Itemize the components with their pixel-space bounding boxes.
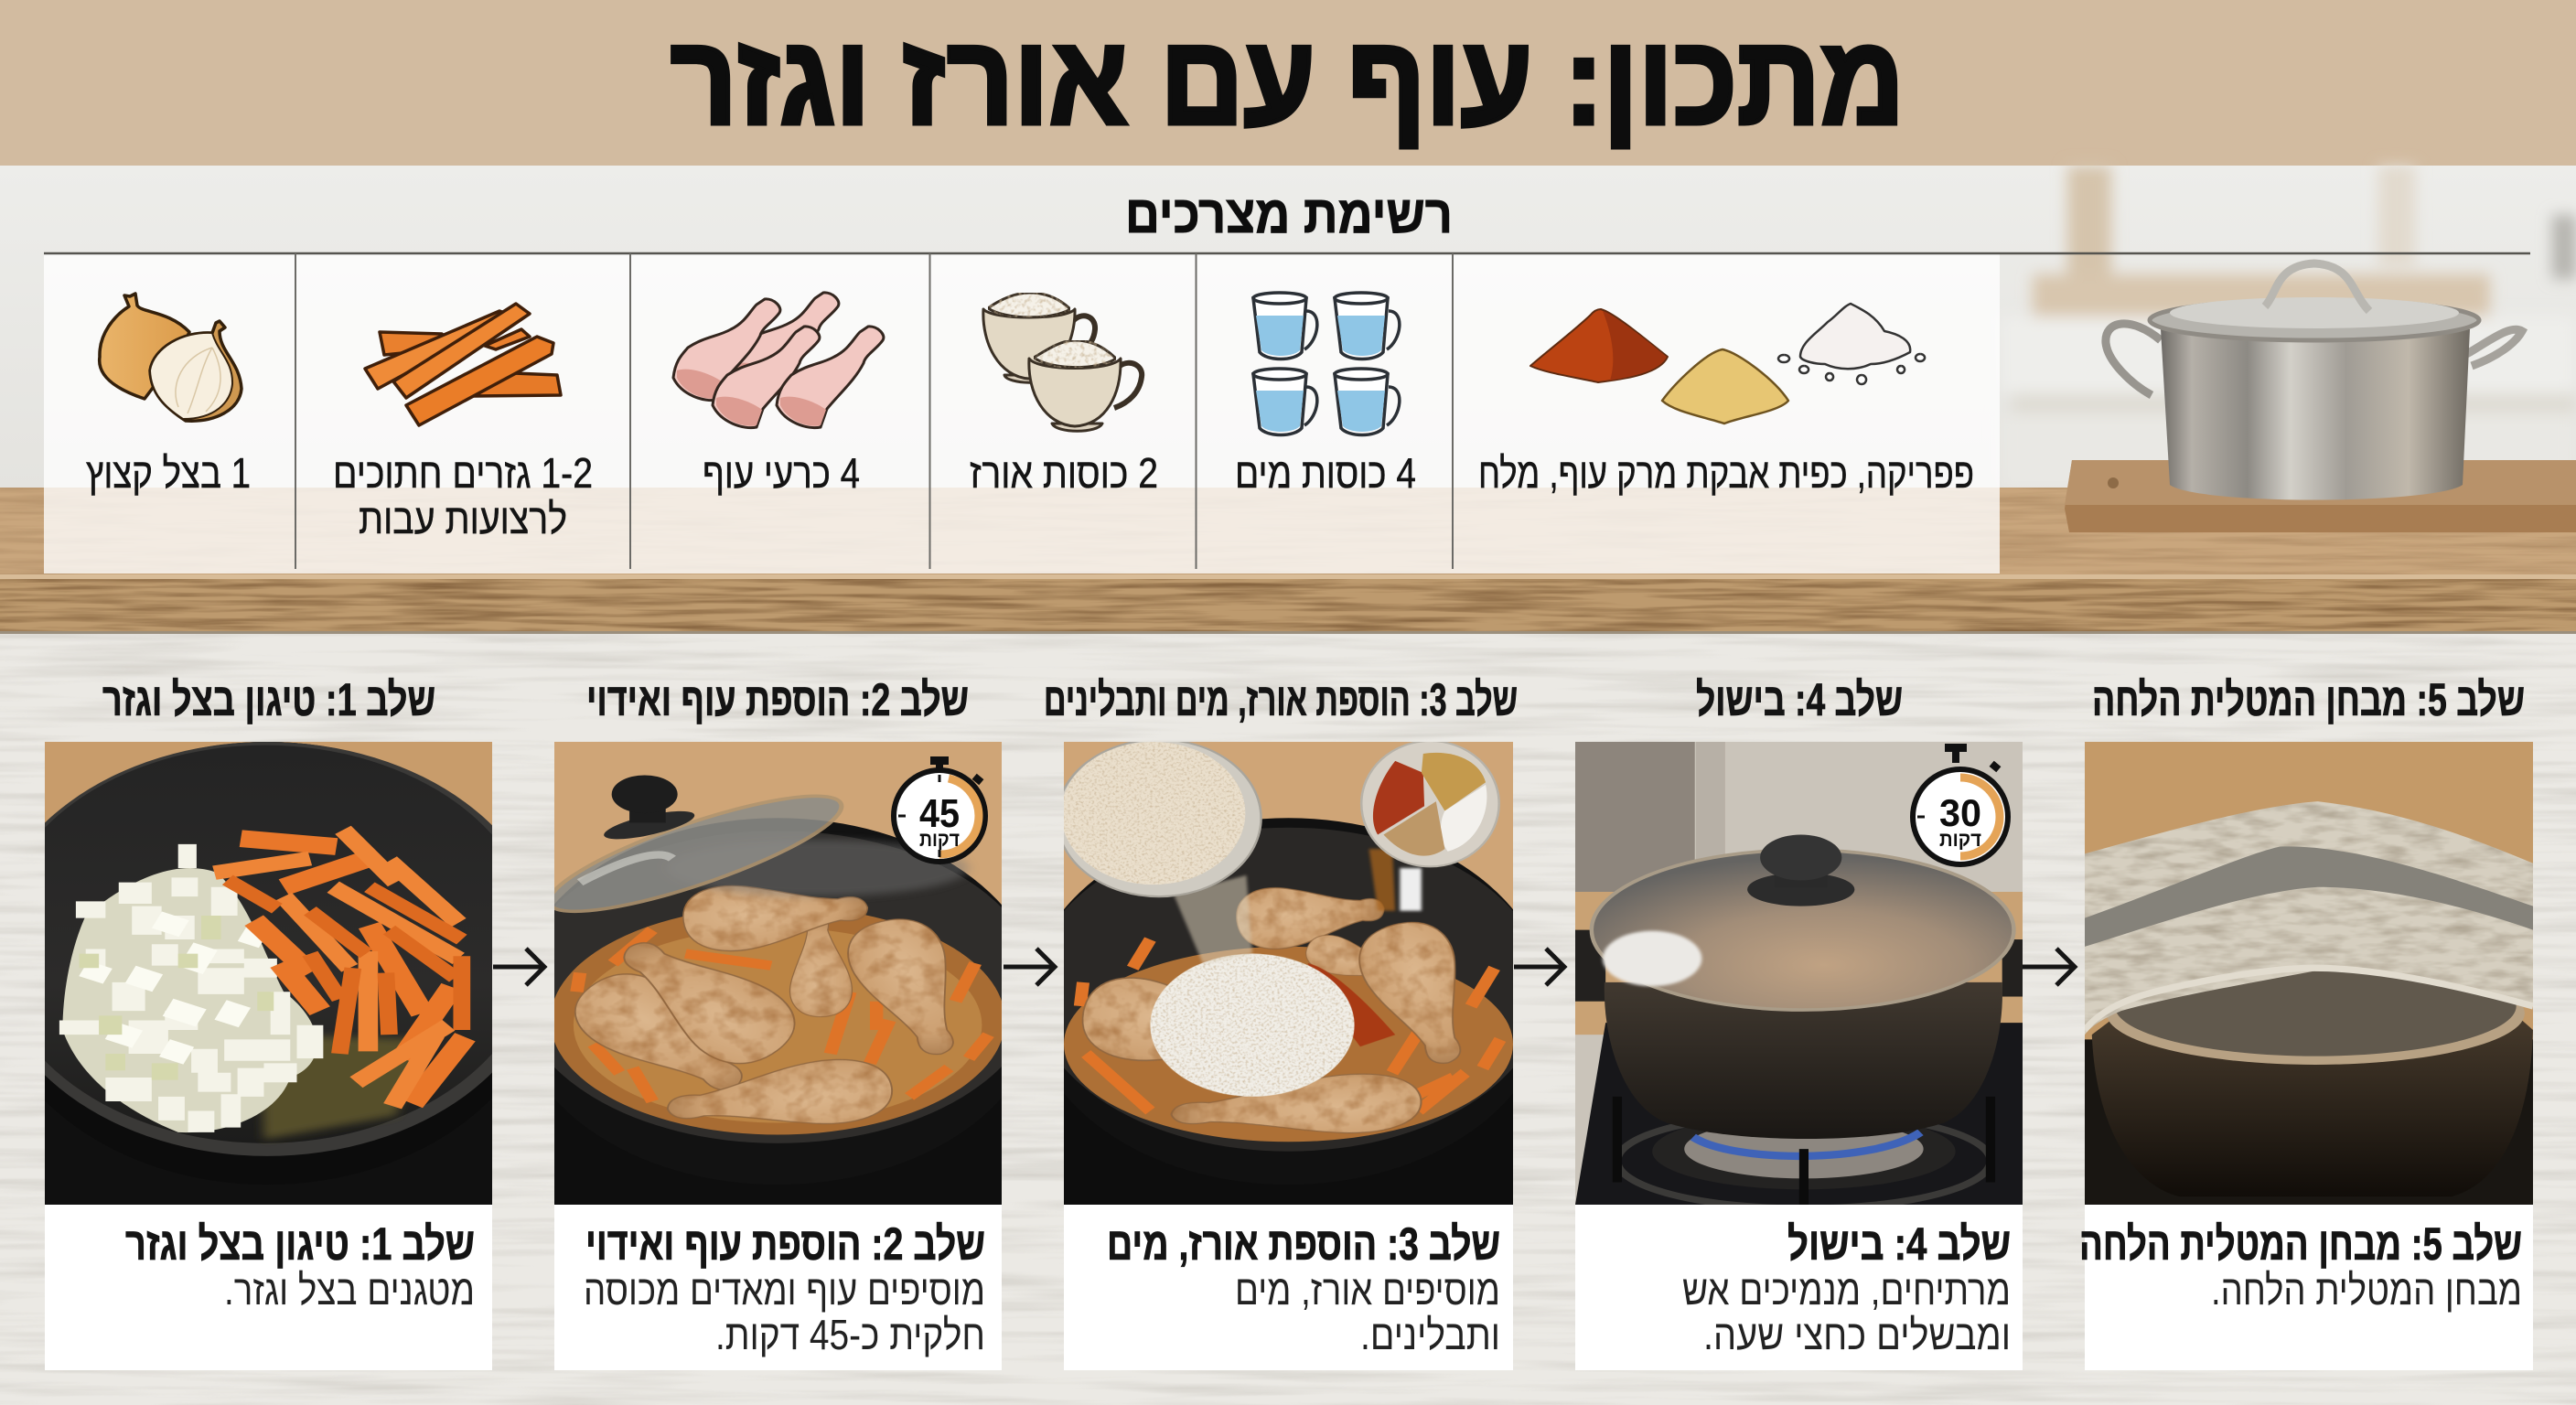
- photo: pot on gas burner: [1575, 742, 2023, 1205]
- ingredient: carrots: [333, 304, 593, 542]
- header band: [0, 0, 2576, 166]
- heading: step 4: שלב 4: בישול: [1696, 674, 1903, 725]
- caption card: step 3: [1064, 1205, 1513, 1370]
- caption card: step 5: מבחן המטלית הלחה.: [2211, 1266, 2522, 1314]
- label: water: 4 כוסות מים: [1235, 449, 1416, 497]
- ingredient: rice: [970, 293, 1158, 497]
- heading: step 5: שלב 5: מבחן המטלית הלחה: [2092, 674, 2525, 725]
- icon: chicken drumsticks: [673, 293, 884, 428]
- kitchen backdrop with counter: [0, 166, 2576, 634]
- caption card: step 2: מוסיפים עוף ומאדים מכוסה: [584, 1266, 985, 1314]
- caption card: step 4: מרתיחים, מנמיכים אש: [1682, 1266, 2011, 1314]
- heading: step 2: שלב 2: הוספת עוף ואידוי: [586, 674, 969, 725]
- photo: chicken with lid: [554, 742, 1002, 1205]
- timer: 30 minutes: [1913, 744, 2008, 864]
- caption card: step 4: [1575, 1205, 2023, 1370]
- label: rice: 2 כוסות אורז: [970, 449, 1158, 497]
- caption card: step 5: [2079, 1205, 2533, 1370]
- photo: towel over pot: [2085, 742, 2533, 1205]
- photo: frying onion and carrot: [45, 742, 492, 1205]
- step 3: [1029, 674, 1548, 1370]
- heading: step 3: שלב 3: הוספת אורז, מים ותבלינים: [1044, 674, 1518, 725]
- icon: steel pot: [2106, 263, 2522, 499]
- caption card: step 1: שלב 1: טיגון בצל וגזר: [125, 1218, 475, 1270]
- arrow 4: [2023, 949, 2075, 985]
- cutting board: [2065, 460, 2576, 532]
- step 2: [514, 674, 1041, 1370]
- timer: 30 minutes: 30: [1939, 791, 1981, 834]
- timer: 45 minutes: [894, 756, 985, 862]
- label: chicken: 4 כרעי עוף: [703, 449, 860, 497]
- arrow 1: [493, 949, 544, 985]
- title: מתכון: עוף עם אורז וגזר: [671, 10, 1905, 151]
- caption card: step 3: ותבלינים.: [1360, 1311, 1500, 1358]
- label: carrots: לרצועות עבות: [359, 495, 567, 542]
- caption card: step 1: [45, 1205, 492, 1370]
- ingredient: spices: [1478, 304, 1974, 497]
- step 5: [2079, 674, 2533, 1370]
- label: carrots: 1-2 גזרים חתוכים: [333, 449, 593, 497]
- label: spices: פפריקה, כפית אבקת מרק עוף, מלח: [1478, 449, 1974, 497]
- timer: 45 minutes: דקות: [919, 828, 960, 851]
- caption card: step 2: חלקית כ-45 דקות.: [715, 1311, 985, 1358]
- ingredient: chicken: [673, 293, 884, 497]
- ingredient: onion: [86, 294, 251, 497]
- icon: cups of rice: [983, 293, 1142, 431]
- photo: adding rice, water and spices: [1064, 742, 1513, 1205]
- panel: ingredients list: [44, 185, 2530, 574]
- arrow 2: [1004, 949, 1055, 985]
- caption card: step 2: שלב 2: הוספת עוף ואידוי: [585, 1218, 985, 1270]
- panel: pot on cutting board: [2065, 263, 2576, 532]
- heading: step 1: שלב 1: טיגון בצל וגזר: [102, 674, 435, 725]
- heading: ingredients: רשימת מצרכים: [1125, 185, 1453, 244]
- caption card: step 4: ומבשלים כחצי שעה.: [1703, 1311, 2011, 1358]
- label: onion: 1 בצל קצוץ: [86, 449, 251, 497]
- caption card: step 3: מוסיפים אורז, מים: [1235, 1266, 1500, 1314]
- timer: 45 minutes: 45: [919, 791, 960, 836]
- caption card: step 1: מטגנים בצל וגזר.: [224, 1266, 475, 1314]
- step 1: [0, 674, 551, 1370]
- icon: four glasses of water: [1253, 293, 1400, 435]
- icon: onions: [100, 294, 242, 421]
- caption card: step 4: שלב 4: בישול: [1787, 1218, 2011, 1270]
- caption card: step 2: [554, 1205, 1002, 1370]
- arrow 3: [1514, 949, 1564, 985]
- step 4: [1575, 674, 2023, 1370]
- timer: 30 minutes: דקות: [1939, 828, 1981, 851]
- caption card: step 5: שלב 5: מבחן המטלית הלחה: [2079, 1218, 2522, 1270]
- label: carrots: [333, 449, 593, 542]
- icon: carrot sticks: [365, 304, 561, 425]
- icon: spice piles: [1530, 304, 1925, 424]
- background: whitewashed wood: [0, 631, 2576, 1405]
- caption card: step 3: שלב 3: הוספת אורז, מים: [1107, 1218, 1500, 1270]
- ingredient: water: [1235, 293, 1416, 497]
